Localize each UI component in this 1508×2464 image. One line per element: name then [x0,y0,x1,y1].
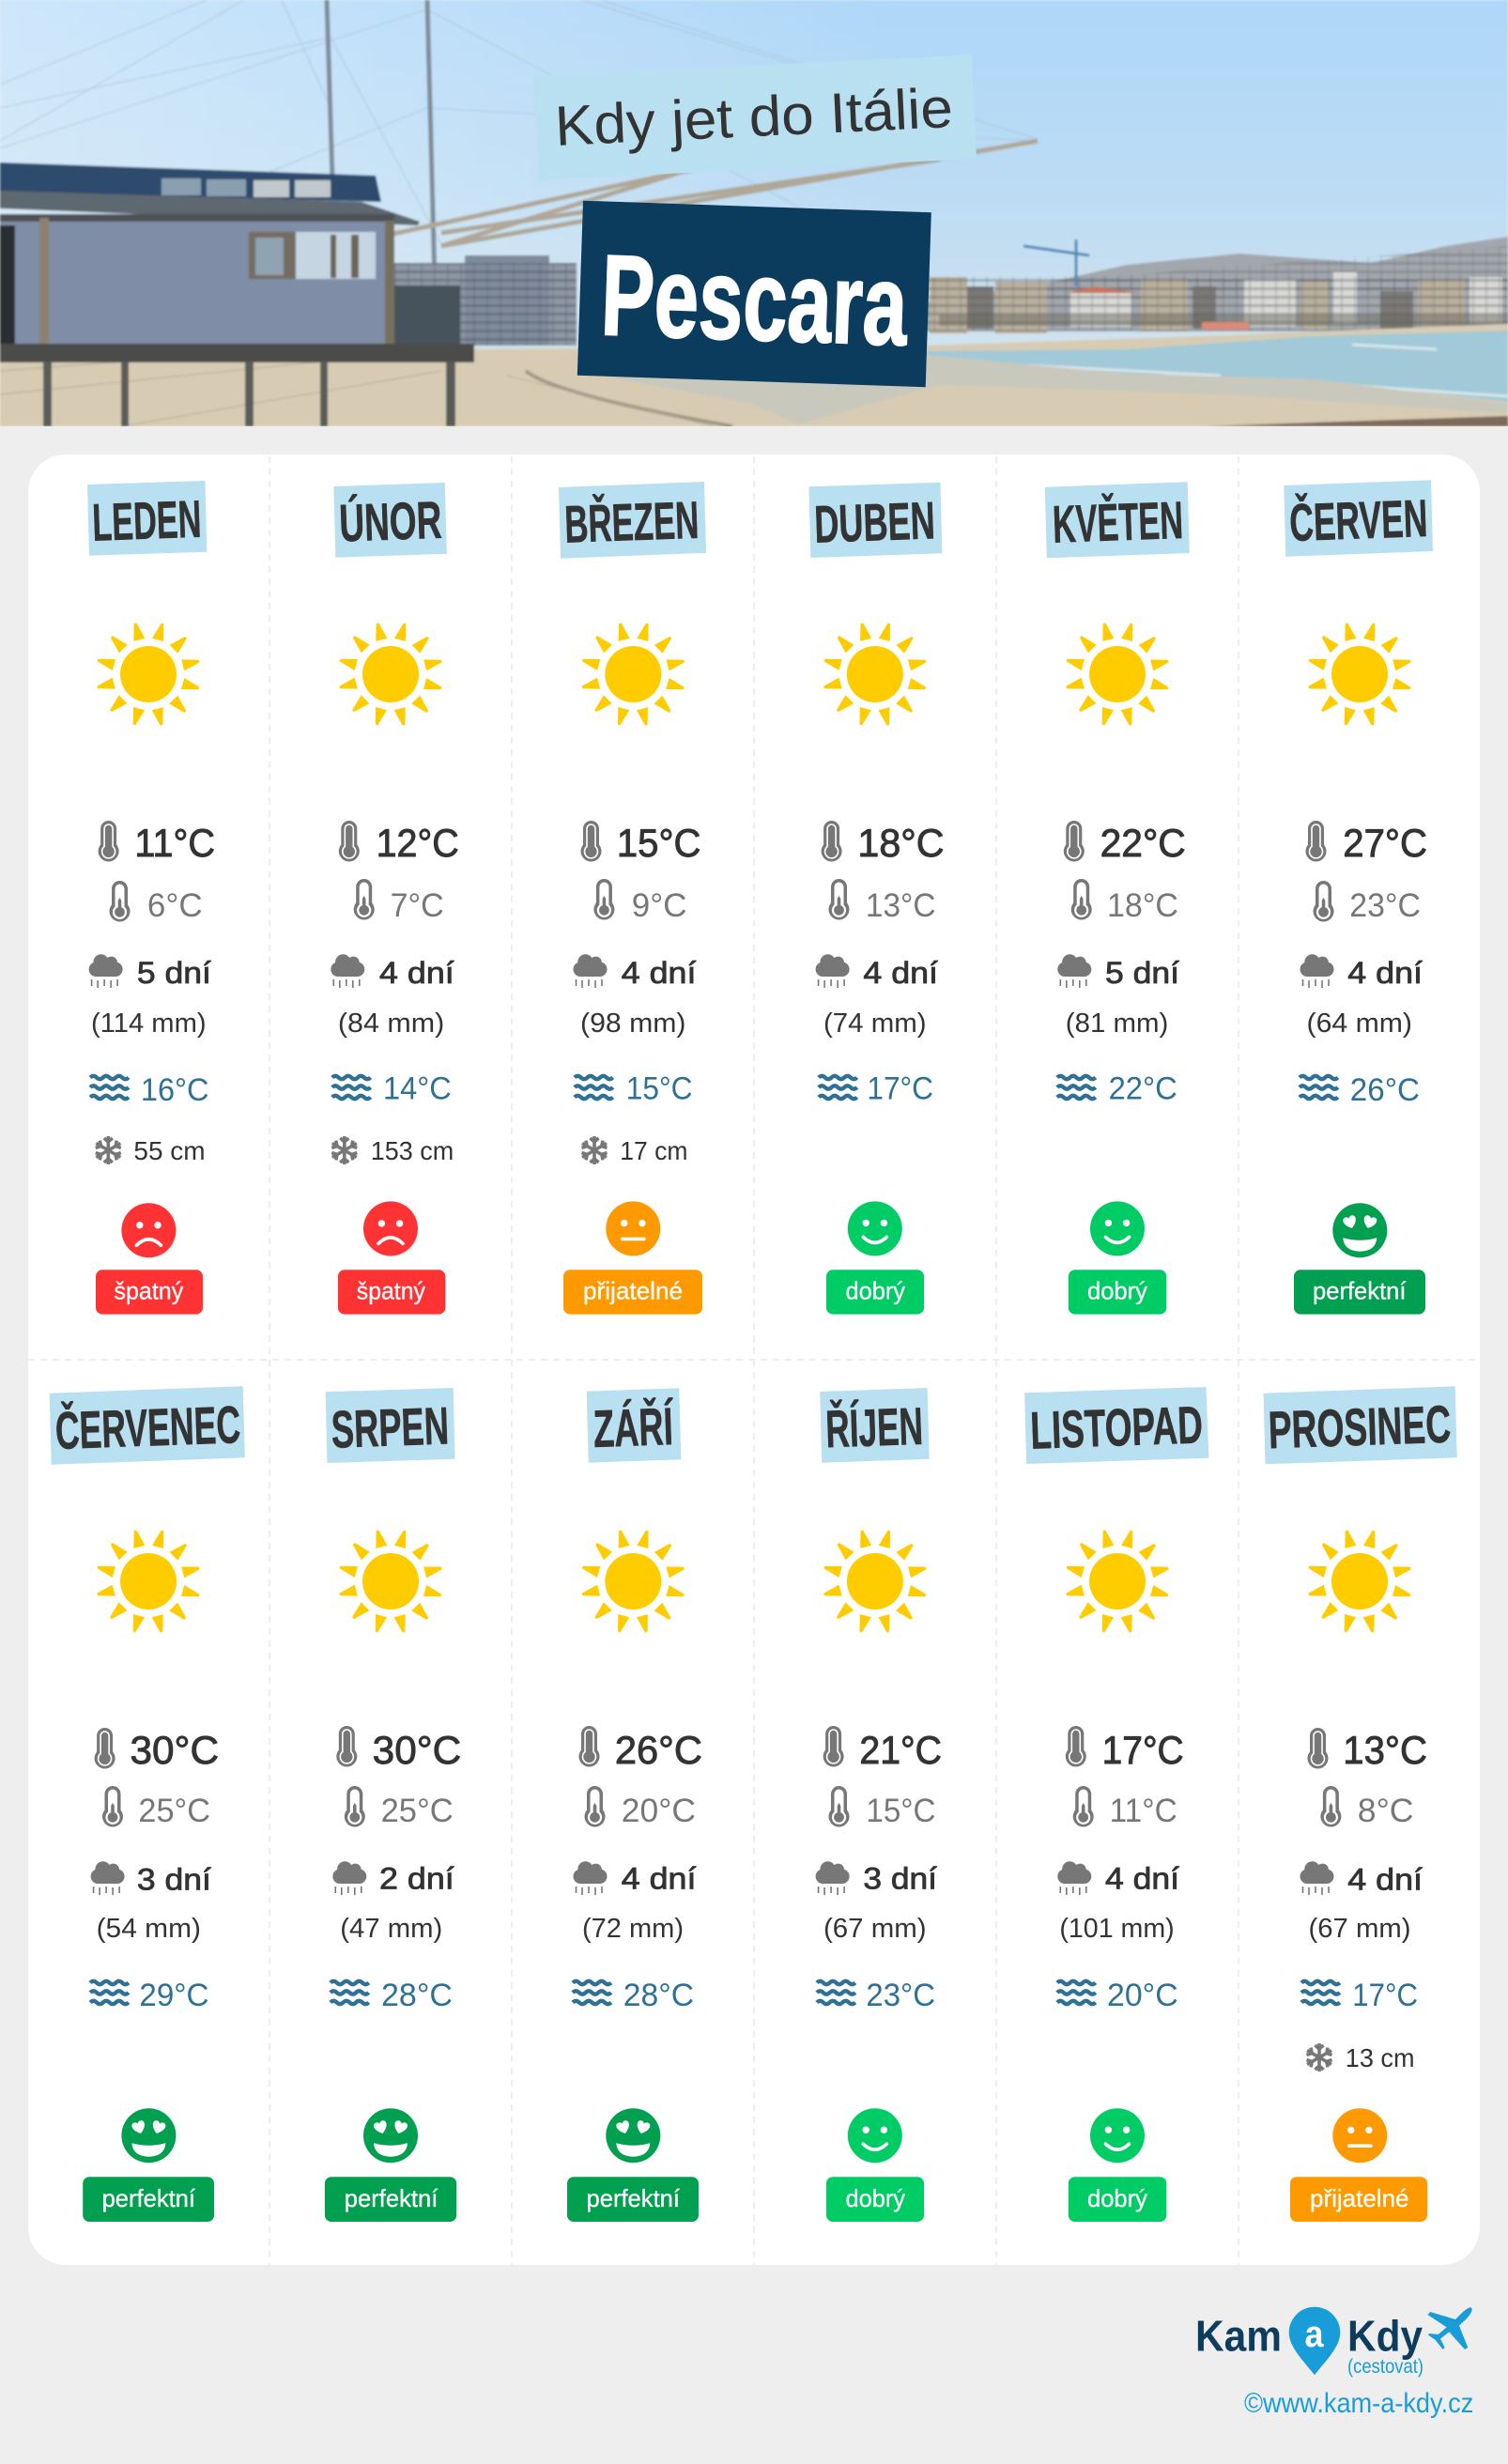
rating badge [567,2177,699,2222]
rainfall: (67 mm) [823,1914,927,1944]
snow: 55 cm [133,1136,206,1165]
high temperature [1305,821,1427,865]
sea temperature: 28°C [381,1978,453,2013]
rating face [1090,2108,1145,2163]
rainfall: (47 mm) [340,1914,442,1944]
rating badge [563,1270,702,1315]
snow: 13 cm [1346,2043,1414,2072]
rating face [606,1201,660,1255]
rainy days [816,954,938,990]
month: červenec [50,1386,245,2222]
high temperature [1307,1728,1427,1772]
month: duben [808,483,945,1315]
rating badge [1294,1270,1425,1315]
month tag [87,481,207,556]
rainy days [1057,1861,1179,1895]
low temperature: 13°C [866,887,935,924]
high temperature [580,821,700,865]
rainfall: (81 mm) [1066,1009,1168,1039]
rating badge: dobrý [845,1277,905,1305]
rating face [121,2108,176,2163]
rating badge [83,2177,214,2222]
low temperature [1320,1786,1414,1829]
rating badge [826,2177,924,2222]
panel: monthly climate table [28,454,1480,2265]
icon: sun [339,1530,442,1633]
icon: sun [1066,1530,1169,1633]
logo: Kam a Kdy: Kdy [1347,2311,1423,2360]
title tag: Pescara: Pescara [599,231,910,369]
month tag [1024,1387,1208,1464]
high temperature: 17°C [1102,1728,1184,1772]
rating face [363,1201,418,1255]
month: srpen [325,1388,461,2222]
snow [580,1136,687,1165]
low temperature [828,1786,935,1829]
city on the right [925,237,1508,331]
sea temperature: 17°C [867,1070,933,1106]
month tag [820,1388,930,1463]
month tag: DUBEN [813,490,936,554]
low temperature: 7°C [391,887,444,924]
rainfall: (101 mm) [1059,1914,1175,1944]
rating badge: dobrý [1087,1277,1147,1305]
rainy days: 4 dní [1105,1861,1179,1895]
rainy days [332,1861,454,1895]
month tag: LISTOPAD [1029,1394,1204,1460]
heading tag: Kdy jet do Itálie [534,54,977,180]
icon: sun [1066,623,1169,726]
rating face [121,1203,176,1257]
sea temperature: 26°C [1350,1072,1420,1108]
high temperature: 13°C [1343,1728,1427,1772]
rating badge: dobrý [845,2184,905,2212]
rating badge: přijatelné [583,1277,683,1305]
icon: sun [97,623,200,726]
icon: sun [339,623,442,726]
high temperature [823,1726,942,1772]
sea temperature [1057,1978,1178,2013]
month: březen [559,482,706,1315]
low temperature: 6°C [147,887,203,924]
low temperature [1313,881,1421,924]
month tag: BŘEZEN [563,490,700,554]
heading tag: Kdy jet do Itálie: Kdy jet do Itálie [553,76,954,158]
sea temperature: 22°C [1109,1070,1177,1106]
sea temperature [573,1978,694,2013]
month tag [587,1388,681,1463]
sea temperature [90,1072,208,1108]
low temperature: 23°C [1349,887,1421,924]
month: leden [87,481,215,1315]
rainy days: 3 dní [137,1863,211,1897]
low temperature [345,1786,454,1829]
sea temperature: 29°C [139,1978,208,2013]
sea temperature: 28°C [623,1978,694,2013]
sea temperature [1057,1070,1177,1106]
rating badge: perfektní [345,2184,439,2212]
logo: Kam a Kdy: (cestovat) [1347,2356,1423,2378]
low temperature: 20°C [622,1793,696,1829]
low temperature [584,1786,696,1829]
high temperature: 12°C [377,821,459,865]
icon: sun [97,1530,200,1633]
month tag [1284,480,1433,557]
low temperature [354,879,444,924]
rainy days [1057,954,1179,990]
high temperature: 18°C [857,821,945,865]
low temperature [1071,879,1178,924]
low temperature: 8°C [1358,1793,1414,1829]
icon: airplane [1427,2307,1472,2349]
sea temperature [332,1070,452,1106]
low temperature: 15°C [866,1793,935,1829]
rating badge: perfektní [102,2184,196,2212]
crane [1023,239,1089,286]
month tag: SRPEN [331,1395,450,1459]
month: květen [1045,482,1190,1315]
low temperature [109,881,203,924]
month tag: ZÁŘÍ [592,1396,675,1458]
sea temperature [90,1978,208,2013]
rainy days: 5 dní [137,956,211,990]
month tag: KVĚTEN [1052,490,1184,554]
snow [331,1136,454,1165]
rainy days [573,1861,697,1895]
rainfall: (54 mm) [97,1914,201,1944]
rainy days [573,954,697,990]
month tag [1045,482,1190,558]
low temperature [593,879,687,924]
rating badge: perfektní [1313,1277,1407,1305]
low temperature [102,1786,210,1829]
low temperature [828,879,935,924]
icon: sun [823,623,927,726]
month tag: ŘÍJEN [824,1396,924,1458]
rating face [1332,2108,1387,2163]
sea temperature [331,1978,453,2013]
icon: sun [581,1530,685,1633]
rating face [1332,1203,1387,1257]
rainy days [331,954,454,990]
icon: sun [1308,1530,1411,1633]
rating badge [826,1270,924,1315]
high temperature [1066,1726,1184,1772]
snow: 17 cm [620,1136,687,1165]
high temperature: 26°C [615,1728,702,1772]
snow [1305,2043,1414,2072]
low temperature: 18°C [1107,887,1178,924]
high temperature [822,821,945,865]
month tag: ČERVEN [1288,488,1428,552]
high temperature [336,1726,461,1772]
rainfall: (74 mm) [823,1009,927,1039]
sea temperature: 15°C [626,1070,693,1106]
high temperature: 22°C [1100,821,1186,865]
high temperature: 30°C [373,1728,461,1772]
month: červen [1284,480,1433,1315]
rating badge [1290,2177,1427,2222]
icon: sun [823,1530,927,1633]
icon: sun [581,623,685,726]
low temperature: 25°C [381,1793,454,1829]
icon: sun [1308,623,1411,726]
sea temperature: 17°C [1352,1978,1418,2013]
rating face [1090,1201,1145,1255]
icon: map pin [1289,2307,1340,2375]
month tag: LEDEN [91,489,202,552]
high temperature: 21°C [859,1728,942,1772]
sea temperature: 20°C [1107,1978,1178,2013]
sea temperature: 14°C [383,1070,452,1106]
rainy days: 3 dní [863,1861,937,1895]
high temperature [99,821,215,865]
sea temperature [817,1978,935,2013]
distant left buildings [392,263,577,346]
rating face [363,2108,418,2163]
snow [94,1136,206,1165]
high temperature [578,1726,702,1772]
rating badge [325,2177,456,2222]
rainy days: 5 dní [1105,956,1179,990]
month: únor [331,483,459,1315]
high temperature: 11°C [134,821,215,865]
rainy days [1300,1861,1423,1897]
month tag: ČERVENEC [54,1394,241,1460]
sea temperature: 23°C [866,1978,935,2013]
month: září [567,1388,702,2222]
website link: ©www.kam-a-kdy.cz [1244,2388,1473,2419]
rating face [848,1201,902,1255]
low temperature: 9°C [632,887,687,924]
month tag [559,482,706,559]
low temperature [1073,1786,1177,1829]
high temperature: 15°C [617,821,700,865]
rainy days: 4 dní [1347,956,1423,990]
high temperature: 27°C [1343,821,1427,865]
rainfall: (72 mm) [582,1914,684,1944]
rainy days [1300,954,1423,990]
high temperature: 30°C [130,1728,219,1772]
rainfall: (67 mm) [1309,1914,1410,1944]
month: říjen [816,1388,942,2222]
rainy days [91,1861,211,1897]
high temperature [339,821,459,865]
title tag: Pescara [577,201,931,387]
month tag [50,1386,245,1465]
rating badge [1069,1270,1166,1315]
rating badge: špatný [357,1277,425,1305]
header photo: Pescara beach [0,0,1508,426]
rating badge [338,1270,445,1315]
rating badge: přijatelné [1310,2184,1408,2212]
logo: Kam a Kdy [1195,2307,1472,2378]
rainfall: (98 mm) [580,1009,685,1039]
sea temperature [1300,1072,1420,1108]
rainfall: (84 mm) [338,1009,444,1039]
month tag: ÚNOR [338,490,442,552]
logo: Kam a Kdy: Kam [1195,2311,1282,2360]
sea temperature [819,1070,933,1106]
sea temperature [1301,1978,1418,2013]
rainfall: (64 mm) [1307,1009,1412,1039]
rating badge [96,1270,203,1315]
rainy days: 4 dní [1347,1863,1423,1897]
rainy days: 2 dní [379,1861,454,1895]
low temperature: 25°C [138,1793,210,1829]
rainy days [816,1861,937,1895]
month: listopad [1024,1387,1208,2222]
rating badge: špatný [115,1277,183,1305]
rating badge: dobrý [1087,2184,1147,2212]
rating badge: perfektní [586,2184,681,2212]
month: prosinec [1264,1386,1457,2222]
month tag [808,483,942,558]
month tag [333,483,447,558]
rainy days: 4 dní [622,956,697,990]
rating face [606,2108,660,2163]
rating face [848,2108,902,2163]
rainy days [89,954,211,990]
snow: 153 cm [371,1136,454,1165]
high temperature [1064,821,1186,865]
low temperature: 11°C [1110,1793,1177,1829]
rainy days: 4 dní [863,956,938,990]
rainy days: 4 dní [379,956,454,990]
rainy days: 4 dní [622,1861,697,1895]
icon: map pin: a [1305,2314,1324,2355]
sea temperature: 16°C [141,1072,208,1108]
rating badge [1069,2177,1166,2222]
sea temperature [575,1070,693,1106]
rainfall: (114 mm) [91,1009,207,1039]
building on stilts [0,162,381,202]
sand and sea [0,324,1508,426]
month tag [326,1388,455,1463]
